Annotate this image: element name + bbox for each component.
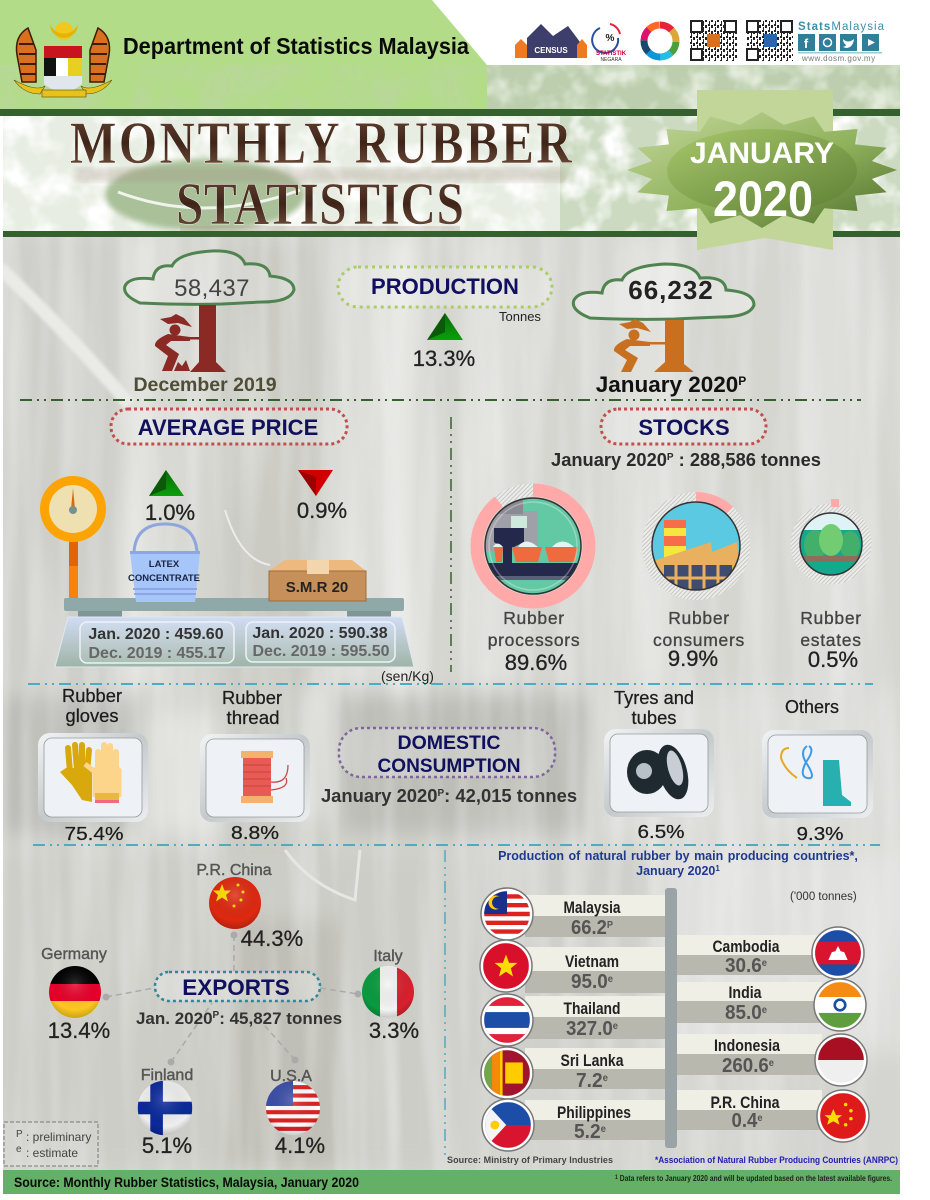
logo: statistics day <box>592 24 627 63</box>
export: USA: U.S.A <box>270 1068 312 1085</box>
donut: rubber estates <box>795 499 867 580</box>
export: Italy <box>354 948 419 1043</box>
row: Cambodia <box>677 927 864 979</box>
export: Finland: Finland <box>141 1067 193 1084</box>
card: tyres and tubes <box>604 688 714 842</box>
label: consumers: Rubber <box>668 608 730 628</box>
row: Indonesia <box>677 1034 867 1086</box>
row: Thailand <box>481 994 665 1046</box>
card: rubber thread: thread <box>226 708 280 728</box>
icon: SMR 20 box: S.M.R 20 <box>286 579 348 596</box>
label: December 2019: December 2019 <box>133 374 277 396</box>
row: P.R. China: 0.4 <box>732 1110 759 1132</box>
row: Vietnam: Vietnam <box>565 952 619 971</box>
logo: StatsMalaysia social: f <box>804 36 809 51</box>
panel: production <box>125 251 754 397</box>
value: latex change: 1.0% <box>145 500 195 525</box>
card: others <box>762 697 873 844</box>
chart title: Production of natural rubber by main producing countries*, <box>498 849 858 863</box>
icon: trees <box>800 514 862 574</box>
icon: processor plant <box>484 497 582 595</box>
panel: average price <box>40 409 434 684</box>
row: Malaysia: 66.2 <box>571 917 610 939</box>
icon: latex bucket <box>128 524 200 602</box>
label: unit: (sen/Kg) <box>381 668 434 684</box>
icon: SMR 20 box <box>269 560 366 601</box>
header photo strip <box>3 65 900 237</box>
title <box>70 109 573 237</box>
panel: exports <box>4 862 419 1166</box>
card: rubber thread <box>200 688 310 843</box>
title: STATISTICS <box>176 170 464 237</box>
row: India: India <box>728 983 762 1002</box>
card: others: 9.3% <box>796 824 844 844</box>
label: processors: Rubber <box>503 608 565 628</box>
icon: factory <box>652 502 740 590</box>
logo: StatsMalaysia social <box>798 21 885 63</box>
row: P.R. China: P.R. China <box>710 1093 780 1112</box>
card: tyres and tubes: tubes <box>632 708 676 728</box>
card: others: Others <box>785 697 839 717</box>
exports total: P <box>213 1010 220 1021</box>
row: Malaysia: P <box>607 920 613 931</box>
label: estates: estates <box>800 630 862 650</box>
heading pill: stocks <box>601 409 766 444</box>
cloud: January 2020 <box>573 264 754 319</box>
icon: thread spool <box>241 751 288 803</box>
row: P.R. China: e <box>757 1113 763 1124</box>
legend: preliminary and estimate: : estimate <box>26 1146 78 1160</box>
arrow up: latex <box>149 470 184 496</box>
card: rubber gloves: Rubber <box>62 686 122 706</box>
footer source: Source: Monthly Rubber Statistics, Malaysia, January 2020 <box>14 1174 359 1190</box>
stocks total: : 288,586 tonnes <box>674 449 821 470</box>
price box: latex concentrate: Dec. 2019 : 455.17 <box>88 645 226 662</box>
consumption total: P <box>438 788 445 799</box>
card: rubber gloves: gloves <box>66 706 118 726</box>
legend: preliminary and estimate: P <box>16 1129 23 1140</box>
price box: SMR 20 <box>246 622 395 662</box>
exports total: : 45,827 tonnes <box>219 1009 342 1028</box>
export: USA: 4.1% <box>275 1133 325 1158</box>
row: Philippines: Philippines <box>557 1103 631 1122</box>
header green banner <box>0 0 487 110</box>
label: January 2020: January 2020 <box>596 372 738 397</box>
row: Malaysia <box>481 888 665 940</box>
card: tyres and tubes: 6.5% <box>638 822 684 842</box>
row: Cambodia: Cambodia <box>712 937 780 956</box>
background photo: rubber tree plantation <box>0 237 900 1170</box>
label: consumers: consumers <box>653 630 745 650</box>
card: tyres and tubes: Tyres and <box>614 688 694 708</box>
logo: census 2020: CENSUS <box>534 46 568 55</box>
connector lines <box>106 935 358 1062</box>
icon: latex bucket: LATEX <box>149 559 180 570</box>
heading pill: average price: AVERAGE PRICE <box>138 415 318 440</box>
card: rubber thread: Rubber <box>222 688 282 708</box>
badge: January 2020: JANUARY <box>690 137 834 170</box>
row: Sri Lanka: 7.2 <box>576 1070 604 1092</box>
arrow down: SMR 20 <box>298 470 333 496</box>
row: India: 85.0 <box>725 1002 764 1024</box>
consumption total: : 42,015 tonnes <box>444 785 577 806</box>
row: P.R. China <box>677 1090 869 1142</box>
label: tonnes: Tonnes <box>499 309 541 324</box>
QR code: Jabatan <box>690 20 737 61</box>
row: Vietnam: 95.0 <box>571 971 610 993</box>
chart title <box>498 849 858 878</box>
central pillar <box>665 888 677 1148</box>
logo: StatsMalaysia social: www.dosm.gov.my <box>801 54 876 63</box>
donut: rubber consumers <box>647 497 745 600</box>
card: rubber gloves: 75.4% <box>64 824 124 844</box>
cloud: January 2020: 66,232 <box>628 275 714 305</box>
export: USA <box>266 1056 325 1158</box>
exports total: Jan. 2020 <box>136 1009 213 1028</box>
label: consumers <box>653 608 745 671</box>
legend: preliminary and estimate <box>4 1122 98 1166</box>
row: Malaysia: Malaysia <box>564 898 621 917</box>
row: Thailand: 327.0 <box>566 1018 616 1040</box>
label: processors: processors <box>488 630 580 650</box>
row: Indonesia: Indonesia <box>714 1036 780 1055</box>
icon: tapper and tree, December <box>155 305 226 372</box>
heading pill: average price <box>111 409 347 444</box>
label: processors <box>488 608 580 675</box>
label: consumers: 9.9% <box>668 646 718 671</box>
price box: SMR 20: Jan. 2020 : 590.38 <box>252 625 388 642</box>
row: India: e <box>762 1005 767 1016</box>
export: Finland: 5.1% <box>142 1133 192 1158</box>
footnote: 1 <box>615 1175 618 1181</box>
panel: domestic consumption <box>38 686 873 844</box>
logo: SDG wheel <box>644 25 676 57</box>
value: SMR change: 0.9% <box>297 498 347 523</box>
logo: statistics day: STATISTIK <box>596 51 627 57</box>
heading pill: exports: EXPORTS <box>182 975 290 1000</box>
row: Thailand: e <box>613 1021 618 1032</box>
row: Sri Lanka: e <box>603 1073 608 1084</box>
export: P.R. China: 44.3% <box>241 926 303 951</box>
footer bar <box>3 1170 900 1194</box>
price box: SMR 20: Dec. 2019 : 595.50 <box>252 643 390 660</box>
label: unit: ('000 tonnes) <box>790 891 857 903</box>
heading pill: domestic consumption: DOMESTIC <box>398 733 501 754</box>
row: Sri Lanka: Sri Lanka <box>560 1051 624 1070</box>
logo: census 2020 <box>515 24 587 58</box>
export: Italy: 3.3% <box>369 1018 419 1043</box>
value: production change: 13.3% <box>413 346 475 371</box>
row: India <box>677 979 866 1031</box>
donut: rubber processors <box>477 490 589 602</box>
icon: tapper and tree, January <box>614 319 694 372</box>
note: ANRPC: *Association of Natural Rubber Producing Countries (ANRPC) <box>655 1155 898 1166</box>
label: estates: Rubber <box>800 608 862 628</box>
department name: Department of Statistics Malaysia <box>123 33 469 59</box>
export: P.R. China <box>196 862 303 951</box>
row: Vietnam <box>480 940 665 993</box>
stocks total: January 2020 <box>551 449 667 470</box>
logo: StatsMalaysia social: StatsMalaysia <box>798 21 885 33</box>
row: Vietnam: e <box>608 974 613 985</box>
consumption total: January 2020 <box>321 785 438 806</box>
row: Cambodia: 30.6 <box>725 955 764 977</box>
row: Thailand: Thailand <box>564 999 620 1018</box>
label: January 2020: P <box>738 374 746 388</box>
row: Cambodia: e <box>762 958 767 969</box>
price box: latex concentrate <box>80 622 234 663</box>
export: Germany <box>41 946 110 1043</box>
cloud: December 2019 <box>125 251 294 304</box>
section dividers <box>20 400 880 1160</box>
QR code: Facebook <box>746 20 793 61</box>
icon: Malaysian coat of arms <box>14 22 112 97</box>
badge: January 2020 <box>627 90 897 250</box>
label: processors: 89.6% <box>505 650 567 675</box>
icon: tyres <box>627 741 694 803</box>
heading pill: domestic consumption: CONSUMPTION <box>378 756 520 777</box>
stocks total: P <box>667 452 674 463</box>
icon: latex bucket: CONCENTRATE <box>128 573 200 584</box>
export: Italy: Italy <box>373 948 403 965</box>
row: Philippines <box>482 1099 665 1151</box>
icon: scale <box>40 476 414 667</box>
logo: statistics day: % <box>606 33 615 44</box>
source note: ministry: Source: Ministry of Primary Industries <box>447 1155 613 1165</box>
logos row <box>515 20 885 63</box>
export: Germany: Germany <box>41 946 107 963</box>
export: P.R. China: P.R. China <box>196 862 272 879</box>
logo: statistics day: NEGARA <box>600 57 622 63</box>
arrow up: production <box>427 313 463 340</box>
heading pill: production: PRODUCTION <box>371 274 519 299</box>
heading pill: stocks: STOCKS <box>638 415 730 440</box>
icon: gloves <box>60 745 119 803</box>
heading pill: production <box>338 267 552 307</box>
badge: January 2020: 2020 <box>713 171 813 227</box>
row: Indonesia: 260.6 <box>722 1055 772 1077</box>
icon: rubber bands and boots <box>781 746 851 806</box>
chart title: January 2020 <box>636 864 715 878</box>
legend: preliminary and estimate: : preliminary <box>26 1130 91 1144</box>
chart title: 1 <box>715 864 720 873</box>
cloud: December 2019: 58,437 <box>174 275 250 302</box>
label: estates: 0.5% <box>808 647 858 672</box>
row: Sri Lanka <box>481 1047 665 1099</box>
row: Philippines: e <box>601 1124 606 1135</box>
export: Germany: 13.4% <box>48 1018 110 1043</box>
heading pill: domestic consumption <box>339 728 555 777</box>
header divider bars <box>0 109 900 237</box>
row: Philippines: 5.2 <box>574 1121 602 1143</box>
price box: latex concentrate: Jan. 2020 : 459.60 <box>88 626 224 643</box>
card: rubber gloves <box>38 686 148 844</box>
legend: preliminary and estimate: e <box>16 1144 22 1155</box>
label: estates <box>800 608 862 672</box>
row: Indonesia: e <box>769 1058 774 1069</box>
card: rubber thread: 8.8% <box>231 823 279 843</box>
title: MONTHLY RUBBER <box>70 109 573 176</box>
panel: stocks <box>477 409 867 675</box>
heading pill: exports <box>155 972 320 1001</box>
export: Finland <box>138 1058 193 1158</box>
panel: production by country <box>447 849 898 1166</box>
